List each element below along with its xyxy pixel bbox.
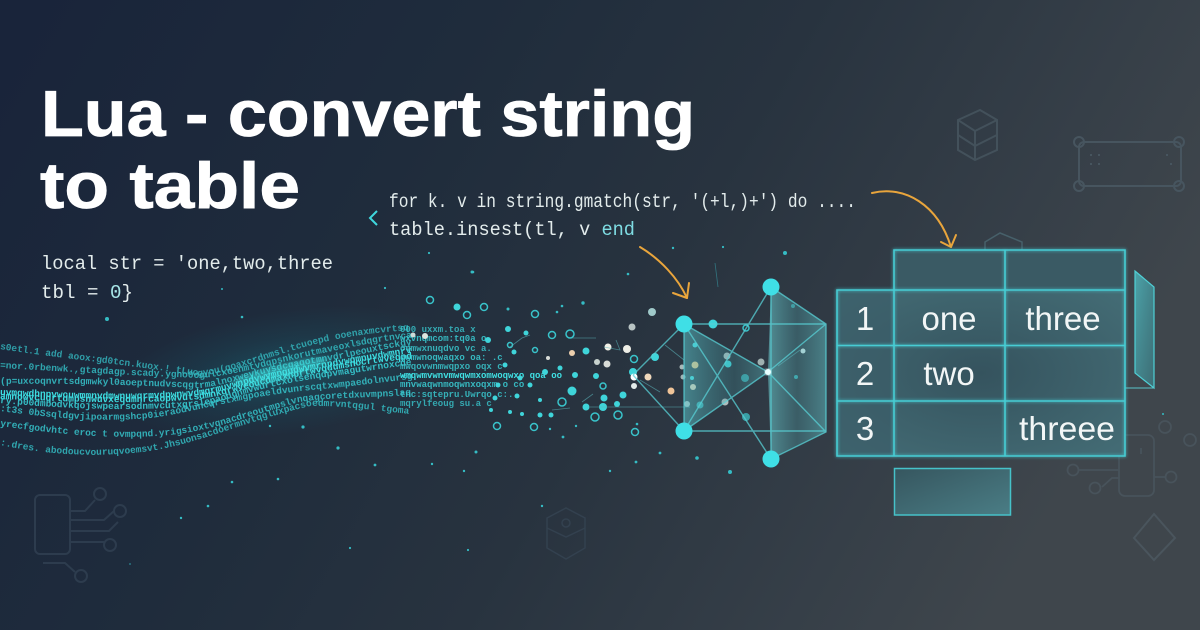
table grid bbox=[837, 250, 1125, 456]
data stream of code characters bbox=[0, 325, 412, 456]
table row labels and values: 2 bbox=[856, 355, 874, 392]
icon: chevron bbox=[370, 211, 377, 225]
title: to table bbox=[40, 149, 300, 222]
table row labels and values bbox=[856, 300, 1115, 447]
stream dissolving into particles: mnvwaqwnmoqwnxoqxm o co bbox=[400, 380, 524, 390]
data stream of code characters: =nor.0rbenwk.,gtagdagp.scady.ygno0ogulcxoenmtvdqpsnkorutmaveoxlsdqgrtnvcaoum bbox=[0, 332, 412, 380]
code: gmatch loop: for k. v in string.gmatch(str, '(+l,)+') do .... bbox=[389, 191, 856, 213]
code: gmatch loop: table.insest(tl, v end bbox=[389, 219, 635, 241]
background icon: cylinder bbox=[547, 508, 585, 559]
arrow: code to table bbox=[872, 191, 956, 247]
polyhedron translucent faces bbox=[684, 324, 768, 431]
stream glow bbox=[103, 286, 467, 458]
thin particle links bbox=[510, 263, 800, 410]
lower empty box bbox=[894, 468, 1010, 515]
stream dissolving into particles: wmqwmvwnvmwqwmxomwoqwxo qoa oo bbox=[400, 371, 562, 381]
table row labels and values: 3 bbox=[856, 410, 874, 447]
background icon: circuit board bbox=[1074, 137, 1184, 191]
background icon: circuit chip bbox=[35, 488, 126, 582]
code: string definition: tbl = 0} bbox=[41, 282, 133, 304]
table row labels and values: threee bbox=[1019, 410, 1115, 447]
table cell fills bbox=[894, 250, 1125, 290]
background icon: stacked cube bbox=[958, 110, 997, 160]
polyhedron edges bbox=[633, 287, 826, 459]
background icon: phone with nodes bbox=[1068, 421, 1196, 496]
stream bright core bbox=[230, 353, 330, 391]
table row labels and values: two bbox=[923, 355, 975, 392]
data stream of code characters: amnowvcuqrtdmpsnwuvxeqdmnrcaopwvutsdmnkqrwveoucdmaxnprtwvqdumsnocrtwveqpdam bbox=[0, 352, 412, 404]
code: string definition: local str = 'one,two,three bbox=[41, 253, 333, 275]
polyhedron network bbox=[633, 278, 826, 468]
data stream of code characters: ry.p00dmbodvkqojswpearsodnmvcutxqrslepaodgnmvwurtcxolsenqdpvmagutwrnoxcdesv bbox=[1, 360, 411, 411]
hollow ring particles bbox=[426, 296, 749, 436]
stream dissolving into particles: tnc:sqtepru.Uwrqo c:. bbox=[400, 390, 513, 400]
data stream of code characters: :t3s 0bSsqldgvjipoarmgshcp0ieraodvuncqrstxmgpoaeldvunrscqtxwmpaedolnvursgq bbox=[2, 374, 412, 422]
particles bbox=[105, 246, 1164, 565]
polyhedron nodes bbox=[676, 278, 780, 468]
stream dissolving into particles: wxvnqmcom:tq0a o. bbox=[400, 334, 492, 344]
stream dissolving into particles: qwmwnoqwaqxo oa: .c bbox=[400, 353, 503, 363]
table row labels and values: 1 bbox=[856, 300, 874, 337]
arrow: code to network bbox=[640, 247, 689, 298]
result table bbox=[837, 250, 1125, 456]
data stream of code characters: (p=uxcoqnvrtsdgmwkyl0aoeptnudvscqgtrmalnoxwevkuysdcgaqotmnvdrlpeouxtsckgyan bbox=[2, 340, 411, 390]
data stream of code characters: :.dres. abodoucvouruqvoemsvt.Jhsuonsacdoermnvtqgluxpacsoedmrvntqgul tgoma bbox=[2, 399, 409, 456]
pale and peach particles bbox=[410, 308, 806, 407]
small scattered dots bbox=[105, 246, 1164, 565]
table row labels and values: three bbox=[1025, 300, 1101, 337]
title bbox=[40, 77, 695, 222]
stream dissolving into particles: ovmwxnuqdvo vc a. bbox=[400, 344, 492, 354]
code: string definition bbox=[41, 253, 333, 304]
stream dissolving into particles: mwqovwnmwqpxo oqx c bbox=[400, 362, 503, 372]
stream dissolving into particles: mqrylfeoug su.a c bbox=[400, 399, 492, 409]
code: gmatch loop bbox=[389, 191, 856, 241]
background icon: diamond bbox=[1134, 514, 1175, 560]
data stream of code characters: uvmqwdhnpvwcuwmmnvdmwnuwqrmvdpwnwvdmqrmuvwnpdvwvmnqudwvmrnpdvwqmnuvdwmnrvq bbox=[0, 348, 411, 400]
title: Lua - convert string bbox=[41, 77, 695, 150]
filled teal particles bbox=[454, 304, 798, 421]
data stream of code characters: s0etl.1 add aoox:gd0tcn.kuox.! tLuogycu(qoaxcrdnmsl.tcuoepd ooenaxmcvrtsqalokvu bbox=[0, 325, 408, 378]
background icon: hexagon behind table bbox=[985, 233, 1022, 286]
side panel bbox=[1116, 271, 1154, 390]
table row labels and values: one bbox=[921, 300, 977, 337]
data stream of code characters: yrecfgodvhtc eroc t ovmpqnd.yrigsioxtvqnacdreoutmpslvnqagcoretdxuvmpnslaq bbox=[0, 388, 411, 439]
stream dissolving into particles: 000 uxxm.toa x bbox=[400, 325, 476, 335]
stream dissolving into particles bbox=[400, 325, 562, 409]
